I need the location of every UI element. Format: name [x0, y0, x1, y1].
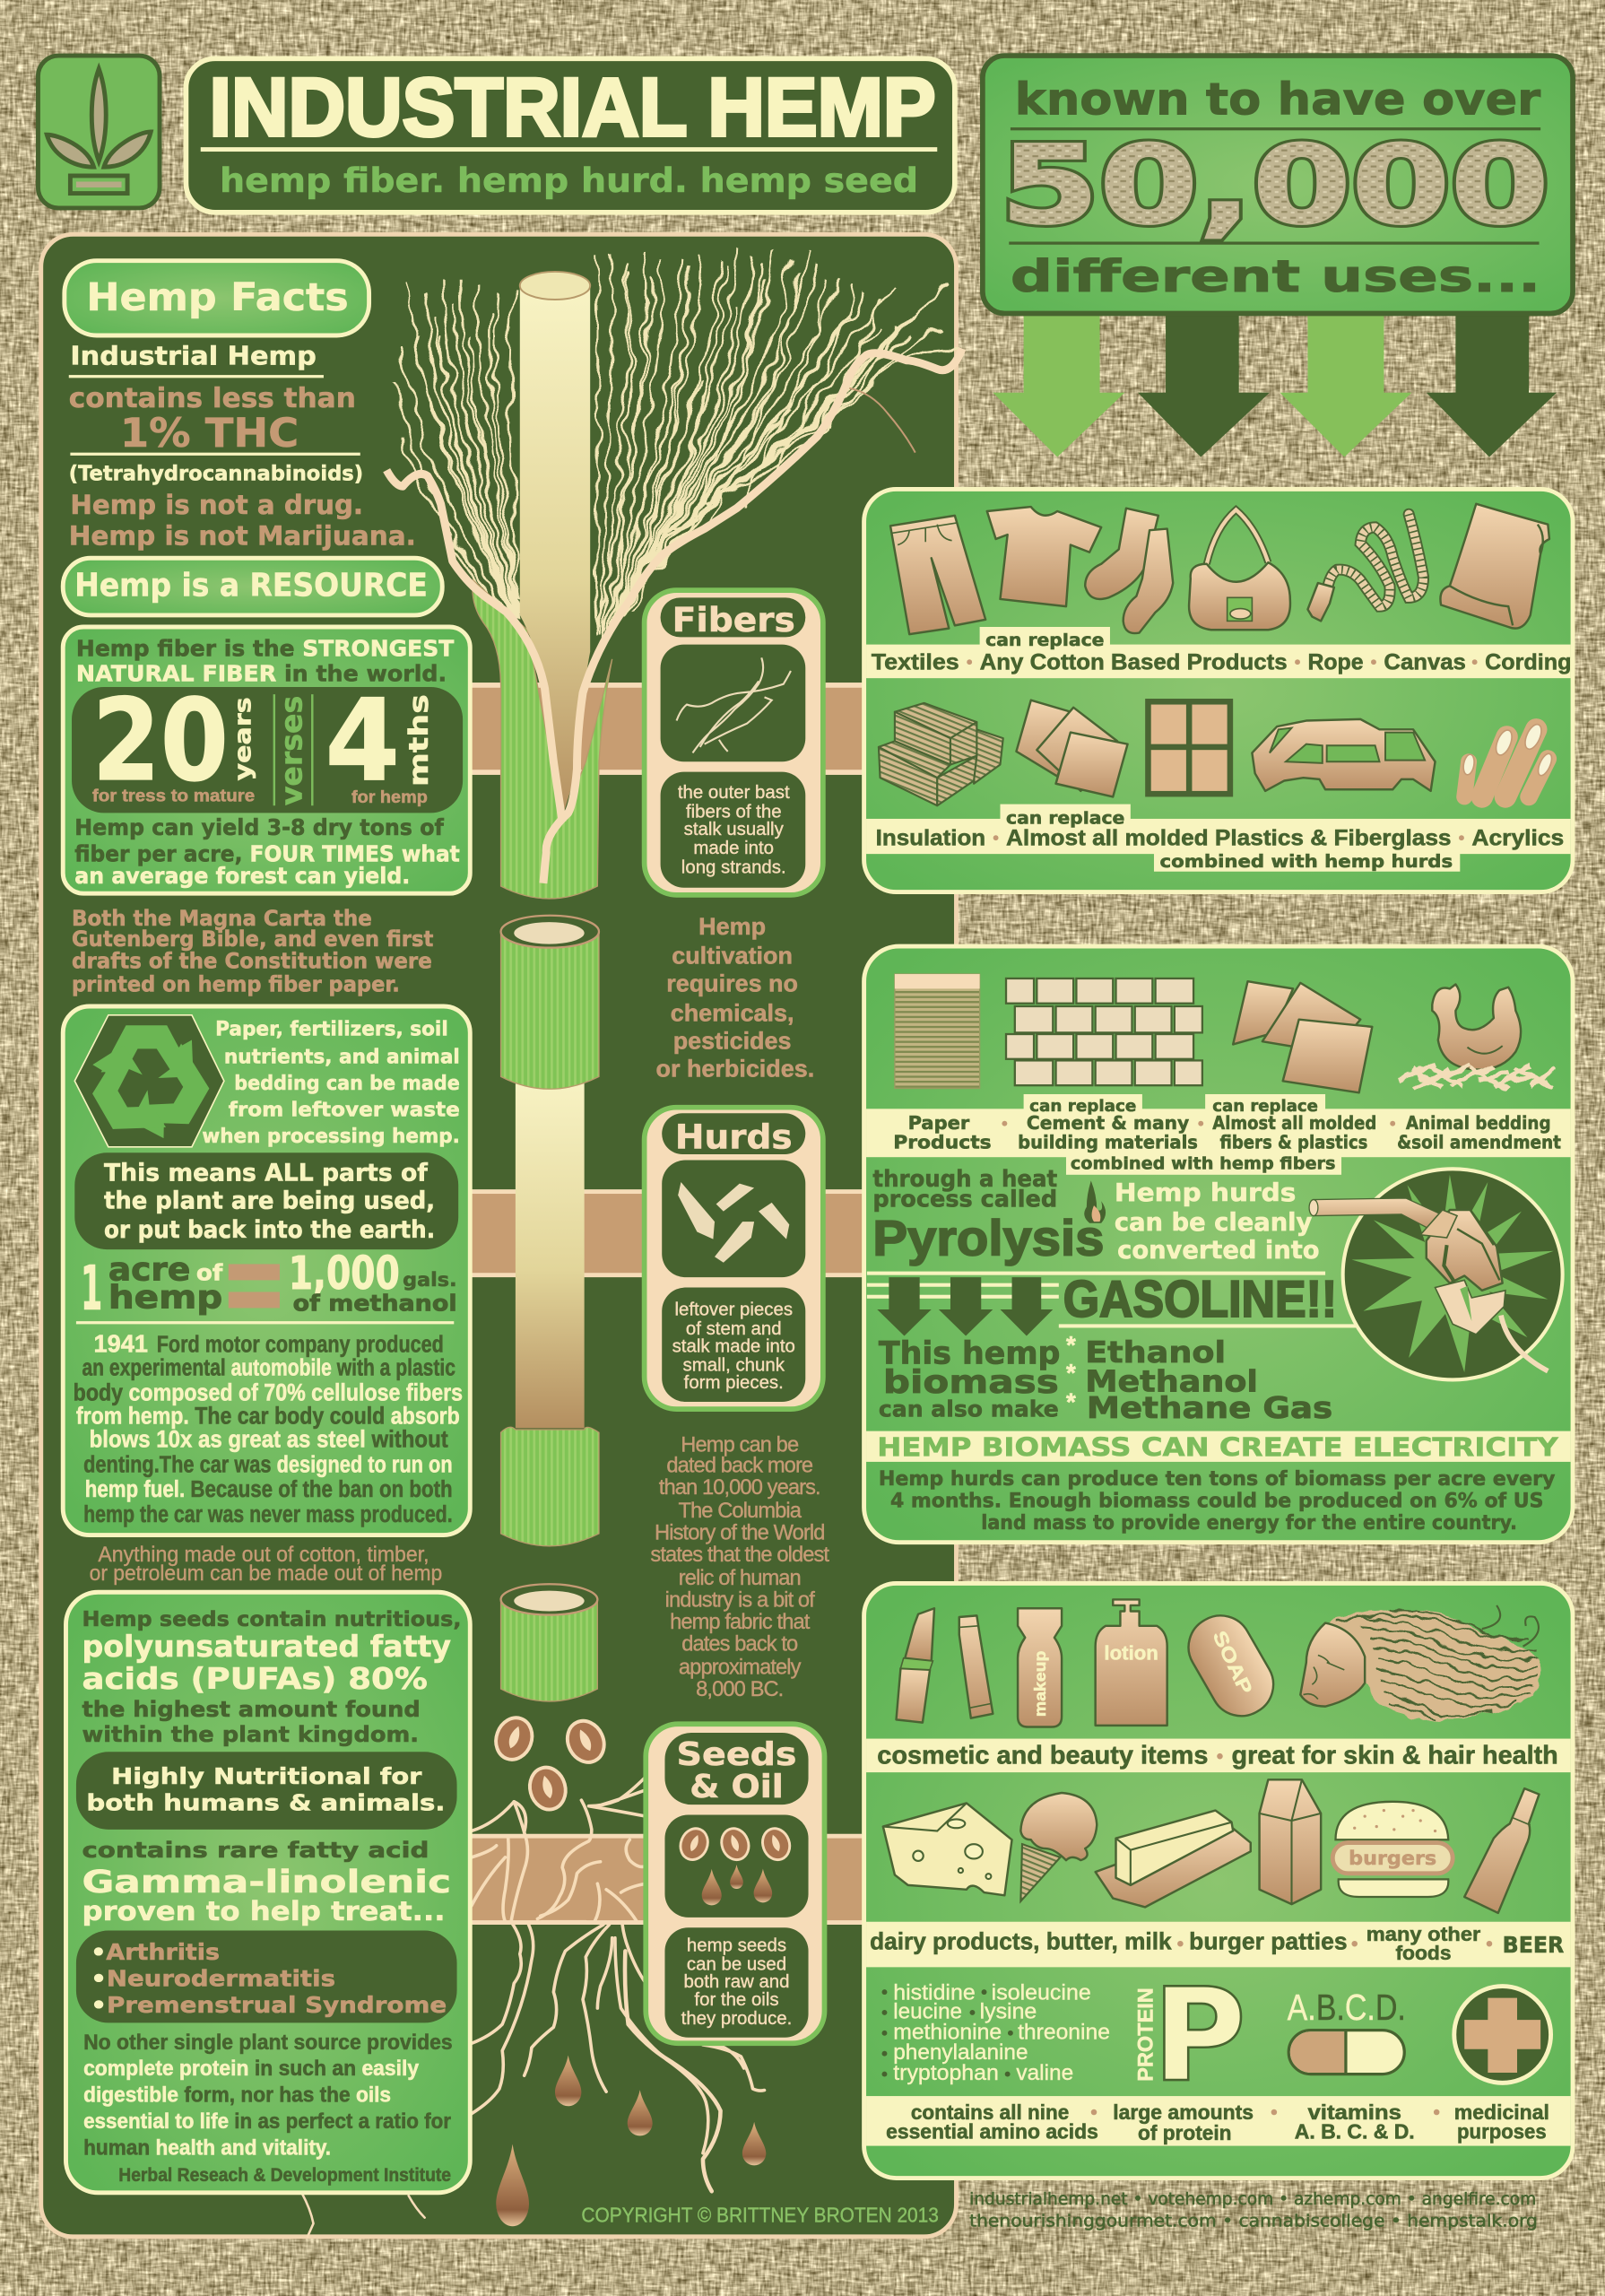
text block: cultivation: cultivation: [672, 943, 793, 970]
equation: 1 acre = 1000 gallons: gals.: [403, 1269, 457, 1292]
text block: 1941 Ford: blows 10x as great as steel without: [90, 1426, 448, 1453]
callout: treatable conditions: •Arthritis: [91, 1939, 220, 1965]
20 years versus 4 months: 20: [92, 674, 229, 806]
icon: acrylic nails: [1462, 722, 1555, 796]
panel: Seeds and Oil: they produce.: [681, 2009, 792, 2029]
20 years versus 4 months: mths: [403, 694, 434, 787]
icon: rope: [1307, 514, 1423, 621]
label band: paper row: can replace: [1029, 1097, 1136, 1116]
text block: cotton timber petroleum: [90, 1544, 442, 1586]
panel: seeds nutrition: contains rare fatty acid: [82, 1838, 429, 1863]
text block: 1941 Ford: 1941: [94, 1329, 148, 1357]
text block: history: dates back to: [681, 1633, 798, 1657]
icon: protein P: P: [1152, 1961, 1246, 2110]
icon: cheese: [883, 1803, 1012, 1895]
text block: THC facts: Hemp is not a drug.: [70, 490, 363, 520]
equation: 1 acre = 1000 gallons: acre: [108, 1251, 190, 1288]
text block: pyrolysis: process called: [872, 1187, 1057, 1213]
icon: makeup bottle: makeup: [1031, 1651, 1049, 1717]
text block: history: The Columbia: [678, 1500, 802, 1523]
equation: 1 acre = 1000 gallons: [81, 1247, 457, 1325]
panel: seeds nutrition: the highest amount found: [82, 1697, 421, 1722]
icon: lotion pump: [1096, 1599, 1167, 1726]
icon: canvas scroll: [1440, 504, 1549, 629]
equation: 1 acre = 1000 gallons: hemp: [108, 1279, 222, 1316]
label band: insulation row: can replace: [1006, 810, 1124, 829]
oil drops: [496, 2056, 766, 2226]
callout: highly nutritional: both humans & animals.: [86, 1790, 445, 1816]
icon: lotion pump: lotion: [1104, 1641, 1158, 1664]
label band: textiles row: can replace: [985, 631, 1104, 650]
panel: Fibers: fibers of the: [686, 802, 782, 822]
stalk lower: cut section: [501, 1584, 597, 1701]
text block: 1941 Ford: an experimental automobile with a plastic: [82, 1354, 455, 1381]
text block: 1941 Ford: denting.The car was designed to run on: [83, 1450, 453, 1477]
text block: cotton timber petroleum: or petroleum can be made out of hemp: [90, 1562, 442, 1586]
label band: paper row: can replace: [1212, 1097, 1318, 1116]
icon: paper notepad: [895, 974, 980, 1088]
text block: biomass energy: land mass to provide energy for the entire country.: [981, 1512, 1517, 1535]
text block: biomass energy: Hemp hurds can produce ten tons of biomass per acre every: [879, 1468, 1555, 1491]
panel: recycling and methanol: nutrients, and animal: [224, 1047, 460, 1069]
20 years versus 4 months: 4: [325, 674, 400, 806]
amino acid list: histidine: [893, 1981, 976, 2005]
text block: history: industry is a bit of: [665, 1589, 815, 1613]
text block: THC facts: Industrial Hemp: [70, 341, 317, 371]
panel: Hurds: Hurds: [675, 1117, 793, 1156]
callout: treatable conditions: •Neurodermatitis: [91, 1966, 335, 1992]
callout: highly nutritional: Highly Nutritional for: [111, 1763, 422, 1789]
text block: history: Hemp can be: [681, 1433, 799, 1457]
panel: Seeds and Oil: hemp seeds: [687, 1935, 786, 1955]
text block: pyrolysis: [872, 1166, 1320, 1266]
icon: recycling hexagon: [74, 1015, 224, 1151]
panel: Hurds: stalk made into: [672, 1336, 795, 1356]
panel: recycling and methanol: bedding can be made: [234, 1073, 460, 1095]
copyright: COPYRIGHT © BRITTNEY BROTEN 2013: [581, 2204, 939, 2227]
panel: strongest natural fiber: [63, 627, 470, 893]
text block: THC facts: [69, 341, 416, 552]
amino acid list: [882, 1981, 1110, 2085]
text block: biomass energy: 4 months. Enough biomass could be produced on 6% of US: [890, 1491, 1543, 1513]
text block: biomass fuels: *: [1066, 1331, 1076, 1359]
label band: foods: many other: [1366, 1923, 1481, 1945]
text block: THC facts: Hemp is not Marijuana.: [69, 521, 416, 552]
heading: Hemp is a RESOURCE: [63, 558, 442, 615]
label band: paper row: combined with hemp fibers: [1071, 1154, 1335, 1173]
label band: insulation row: Insulation: [876, 825, 985, 850]
text block: history: hemp fabric that: [670, 1611, 811, 1634]
panel: recycling and methanol: from leftover waste: [229, 1099, 460, 1121]
horizontal band: fibers: [469, 683, 864, 775]
label band: nutrition: essential amino acids: [886, 2119, 1098, 2143]
heading: Hemp is a RESOURCE: Hemp is a RESOURCE: [74, 568, 428, 604]
text block: biomass fuels: Ethanol: [1085, 1335, 1226, 1370]
stalk middle: bark sleeve with core: [501, 916, 599, 1546]
callout: all parts used: [74, 1152, 458, 1249]
panel: seeds nutrition: polyunsaturated fatty: [82, 1630, 451, 1664]
text block: Magna Carta: Both the Magna Carta the: [72, 906, 372, 931]
icon: t-shirt: [987, 507, 1101, 606]
20 years versus 4 months: [72, 674, 463, 813]
panel: seeds nutrition: Gamma-linolenic: [82, 1865, 451, 1900]
panel: seeds nutrition: [65, 1592, 470, 2193]
panel: seeds nutrition: digestible form, nor has the oils: [83, 2083, 391, 2108]
label band: paper row: Animal bedding: [1406, 1112, 1551, 1134]
title: INDUSTRIAL HEMP: [210, 62, 936, 153]
label band: paper row: Products: [893, 1131, 992, 1152]
label band: insulation row: [866, 804, 1571, 872]
callout: all parts used: or put back into the earth.: [104, 1216, 435, 1244]
text block: 1941 Ford: Ford motor company produced: [157, 1330, 444, 1357]
icon: fuel nozzle in starburst: [1309, 1169, 1563, 1379]
panel: seeds nutrition: human health and vitality.: [83, 2135, 331, 2160]
icon: soap bar: [1177, 1605, 1285, 1727]
icon: chicken on bedding: [1399, 984, 1555, 1090]
text block: history: than 10,000 years.: [659, 1476, 820, 1500]
text block: biomass fuels: biomass: [883, 1364, 1059, 1401]
logo badge: [38, 56, 160, 208]
label band: textiles row: [866, 627, 1571, 678]
label band: textiles row: Any Cotton Based Products: [980, 649, 1288, 674]
panel: recycling and methanol: [63, 1006, 470, 1535]
panel: strongest natural fiber: an average forest can yield.: [74, 863, 410, 889]
20 years versus 4 months: for hemp: [351, 787, 428, 807]
panel: Hurds: form pieces.: [684, 1373, 784, 1393]
label band: nutrition: medicinal: [1454, 2100, 1549, 2124]
text block: pyrolysis: Hemp hurds: [1115, 1178, 1296, 1207]
panel: seeds nutrition: acids (PUFAs) 80%: [82, 1662, 428, 1696]
callout: highly nutritional: [76, 1752, 457, 1830]
amino acid list: tryptophan: [893, 2062, 999, 2085]
text block: pyrolysis: converted into: [1117, 1235, 1320, 1265]
label band: foods: BEER: [1503, 1932, 1564, 1958]
callout: 50,000 uses: [983, 56, 1573, 313]
icon: flowing hair and face: [1300, 1605, 1541, 1719]
label band: paper row: &soil amendment: [1397, 1131, 1561, 1152]
equation: 1 acre = 1000 gallons: 1: [81, 1253, 102, 1325]
label band: paper row: Cement & many: [1027, 1112, 1189, 1134]
panel: Fibers: Fibers: [672, 600, 795, 639]
icon: beer bottle: [1464, 1788, 1540, 1913]
label band: insulation row: Acrylics: [1471, 825, 1564, 850]
panel: recycling and methanol: when processing hemp.: [202, 1126, 460, 1148]
text block: THC facts: contains less than: [69, 383, 356, 414]
label band: nutrition: purposes: [1457, 2119, 1547, 2143]
20 years versus 4 months: for tress to mature: [92, 786, 255, 805]
callout: 50,000 uses: known to have over: [1015, 74, 1541, 125]
text block: biomass fuels: *: [1066, 1388, 1076, 1416]
label band: nutrition: contains all nine: [911, 2100, 1069, 2124]
icon: insulation bales: [879, 703, 1003, 805]
icon: burger: burgers: [1349, 1848, 1436, 1870]
text block: cultivation: Hemp: [698, 913, 766, 940]
amino acid list: isoleucine: [992, 1981, 1091, 2005]
icon: window: [1145, 699, 1233, 796]
label band: textiles row: Canvas: [1384, 649, 1466, 674]
amino acid list: methionine: [893, 2021, 1002, 2044]
icon: seeds and drops: [664, 1815, 809, 1918]
label band: paper row: [866, 1094, 1571, 1175]
panel: recycling and methanol: Paper, fertilizers, soil: [215, 1019, 448, 1041]
horizontal band: seeds: [469, 1834, 864, 1925]
icon: makeup bottle: [1018, 1608, 1062, 1727]
text block: history: states that the oldest: [650, 1544, 829, 1567]
main dark panel: [41, 234, 956, 2237]
callout: treatable conditions: •Premenstrual Syndrome: [91, 1992, 447, 2018]
panel: Seeds and Oil: both raw and: [684, 1972, 789, 1992]
text block: 1941 Ford: hemp fuel. Because of the ban on both: [85, 1475, 453, 1502]
icon: medical cross: [1454, 1987, 1551, 2083]
label band: nutrition: [866, 2096, 1571, 2146]
panel: seeds nutrition: Herbal Reseach & Development Institute: [118, 2165, 451, 2186]
heading: Hemp Facts: Hemp Facts: [86, 276, 349, 320]
text block: 1941 Ford: from hemp. The car body could absorb: [76, 1402, 460, 1429]
callout: 50,000 uses: 50,000: [1000, 122, 1549, 248]
panel: Fibers: long strands.: [681, 857, 786, 877]
icon: socks: [1085, 509, 1173, 633]
icon: plastic sheets: [1233, 981, 1372, 1092]
panel: strongest natural fiber: fiber per acre, FOUR TIMES what: [74, 840, 460, 866]
horizontal band: hurds: [469, 1189, 864, 1277]
amino acid list: lysine: [980, 2001, 1037, 2024]
20 years versus 4 months: years: [230, 697, 256, 780]
panel: Seeds and Oil: can be used: [687, 1955, 786, 1975]
label band: foods: dairy products, butter, milk: [870, 1928, 1172, 1955]
panel: seeds nutrition: No other single plant source provides: [83, 2031, 453, 2055]
label band: nutrition: A. B. C. & D.: [1295, 2119, 1415, 2143]
text block: THC facts: 1% THC: [120, 411, 299, 457]
text block: cultivation: pesticides: [673, 1027, 791, 1054]
text block: pyrolysis: can be cleanly: [1115, 1207, 1312, 1237]
lines and arrows to gasoline: [867, 1272, 1359, 1335]
panel: Seeds and Oil: & Oil: [690, 1769, 784, 1805]
panel: hurd products and fuels: [864, 946, 1573, 1543]
text block: Magna Carta: Gutenberg Bible, and even first: [72, 926, 433, 952]
icon: soap bar: SOAP: [1209, 1628, 1255, 1698]
text block: 1941 Ford: hemp the car was never mass produced.: [83, 1500, 453, 1527]
sources footer: [969, 2190, 1538, 2231]
label band: cosmetics: cosmetic and beauty items: [877, 1741, 1208, 1770]
text block: biomass fuels: *: [1066, 1359, 1076, 1387]
panel: seeds nutrition: essential to life in as perfect a ratio for: [83, 2109, 451, 2134]
callout: 50,000 uses: 50,000: [1000, 122, 1549, 248]
panel: Hurds: small, chunk: [683, 1356, 785, 1376]
label band: paper row: building materials: [1018, 1131, 1198, 1152]
icon: protein P: PROTEIN: [1133, 1987, 1158, 2082]
icon: fiber strands: [661, 645, 805, 761]
panel: Fibers: the outer bast: [678, 783, 790, 803]
equation: 1 acre = 1000 gallons: of methanol: [293, 1291, 457, 1317]
roots: [301, 1777, 765, 2237]
callout: treatable conditions: [76, 1931, 457, 2022]
callout: all parts used: This means ALL parts of: [104, 1159, 428, 1187]
text block: Magna Carta: printed on hemp fiber paper.: [72, 972, 400, 997]
text block: pyrolysis: through a heat: [872, 1166, 1057, 1193]
equation: 1 acre = 1000 gallons: of: [196, 1259, 223, 1285]
text block: cultivation: chemicals,: [671, 999, 794, 1026]
icon: fiberglass sheets: [1016, 700, 1128, 796]
panel: seeds nutrition: complete protein in such an easily: [83, 2057, 419, 2081]
hemp fibers fanning out: [393, 252, 962, 633]
label band: nutrition: vitamins: [1307, 2100, 1401, 2124]
text block: biomass fuels: Methanol: [1085, 1365, 1258, 1399]
20 years versus 4 months: verses: [274, 696, 308, 805]
text block: history: approximately: [679, 1657, 802, 1680]
sources footer: industrialhemp.net • votehemp.com • azhemp.com • angelfire.com: [969, 2190, 1536, 2209]
label band: insulation row: combined with hemp hurds: [1160, 851, 1453, 872]
label band: foods: burger patties: [1189, 1928, 1348, 1955]
panel: Fibers: [645, 590, 823, 895]
text block: history: History of the World: [655, 1521, 824, 1544]
icon: lipstick: [897, 1608, 934, 1723]
icon: pants: [890, 516, 985, 634]
icon: milk carton: [1260, 1779, 1321, 1904]
heading: Hemp Facts: [65, 261, 369, 335]
panel: seeds nutrition: proven to help treat...: [82, 1896, 445, 1926]
label band: foods: [866, 1922, 1571, 1967]
seeds falling: [490, 1713, 611, 1813]
panel: seed products: [864, 1583, 1573, 2179]
text block: biomass fuels: This hemp: [879, 1335, 1060, 1371]
text block: biomass fuels: [879, 1331, 1332, 1425]
callout: 50,000 uses: different uses...: [1011, 251, 1540, 302]
panel: strongest natural fiber: Hemp can yield 3-8 dry tons of: [74, 814, 444, 840]
icon: brick wall: [1006, 978, 1202, 1085]
text block: Magna Carta: drafts of the Constitution were: [72, 949, 432, 974]
text block: cotton timber petroleum: Anything made out of cotton, timber,: [98, 1544, 429, 1567]
icon: flame: [1084, 1180, 1106, 1223]
amino acid list: threonine: [1018, 2021, 1110, 2044]
panel: Seeds and Oil: [646, 1724, 824, 2043]
label band: paper row: fibers & plastics: [1219, 1131, 1367, 1152]
text block: 1941 Ford: [74, 1329, 463, 1527]
text block: 1941 Ford: body composed of 70% cellulose fibers: [74, 1378, 463, 1405]
text block: THC facts: (Tetrahydrocannabinoids): [69, 463, 363, 486]
label band: paper row: Paper: [908, 1112, 969, 1134]
panel: Hurds: [645, 1108, 823, 1409]
icon: handbag: [1189, 509, 1290, 630]
stalk top: bark, peeled fibre edges and core: [386, 272, 962, 899]
equation: 1 acre = 1000 gallons: 1,000: [289, 1247, 400, 1300]
label band: textiles row: Rope: [1307, 649, 1364, 674]
panel: Fibers: made into: [693, 839, 774, 858]
callout: all parts used: the plant are being used,: [104, 1187, 435, 1214]
icon: burger: [1332, 1802, 1453, 1897]
panel: seeds nutrition: within the plant kingdom.: [82, 1722, 419, 1747]
text block: Magna Carta: [72, 906, 433, 997]
text block: biomass energy: [879, 1468, 1555, 1535]
text block: history: relic of human: [679, 1567, 801, 1590]
amino acid list: leucine: [893, 2001, 962, 2024]
text block: history: dated back more: [666, 1454, 813, 1477]
subtitle: hemp fiber. hemp hurd. hemp seed: [220, 161, 918, 200]
icon: hurd pieces: [662, 1160, 805, 1277]
label band: nutrition: of protein: [1138, 2121, 1232, 2144]
icon: car body: [1252, 719, 1436, 791]
icon: vitamins capsule: A.B.C.D.: [1288, 1987, 1406, 2028]
label band: electricity: HEMP BIOMASS CAN CREATE ELECTRICITY: [877, 1431, 1558, 1462]
label band: cosmetics: [866, 1739, 1571, 1772]
text block: biomass fuels: can also make: [879, 1396, 1059, 1422]
label band: nutrition: large amounts: [1113, 2100, 1254, 2124]
label band: foods: foods: [1395, 1942, 1452, 1964]
amino acid list: phenylalanine: [893, 2041, 1028, 2065]
arrows: down to uses: [993, 308, 1557, 457]
label band: paper row: Almost all molded: [1212, 1112, 1376, 1134]
label band: textiles row: Textiles: [872, 649, 959, 674]
panel: Hurds: of stem and: [686, 1319, 782, 1339]
text block: history: 8,000 BC.: [696, 1678, 783, 1701]
heading: gasoline: GASOLINE!!: [1063, 1271, 1337, 1328]
panel: seeds nutrition: Hemp seeds contain nutritious,: [82, 1608, 461, 1631]
panel: Seeds and Oil: for the oils: [694, 1990, 779, 2010]
label band: textiles row: Cording: [1485, 649, 1571, 674]
text block: biomass fuels: Methane Gas: [1087, 1391, 1332, 1425]
label band: insulation row: Almost all molded Plastics & Fiberglass: [1006, 825, 1452, 850]
icon: butter dish: [1096, 1811, 1251, 1907]
text block: cultivation: requires no: [666, 970, 798, 997]
label band: cosmetics: great for skin & hair health: [1232, 1741, 1558, 1770]
panel: fiber and hurd products: [864, 489, 1573, 892]
text block: cultivation: or herbicides.: [656, 1055, 814, 1082]
panel: Fibers: stalk usually: [684, 820, 785, 839]
sources footer: thenourishinggourmet.com • cannabiscollege • hempstalk.org: [969, 2212, 1538, 2231]
icon: vitamins capsule: [1288, 1987, 1406, 2074]
panel: strongest natural fiber: Hemp fiber is the STRONGEST: [76, 636, 455, 662]
icon: lip balm: [959, 1615, 993, 1718]
title panel: [186, 58, 955, 213]
icon: ice cream cone: [1020, 1793, 1097, 1901]
panel: Seeds and Oil: Seeds: [677, 1736, 796, 1773]
panel: Hurds: leftover pieces: [674, 1300, 793, 1320]
panel: strongest natural fiber: NATURAL FIBER in the world.: [76, 660, 447, 686]
text block: pyrolysis: Pyrolysis: [872, 1211, 1104, 1266]
amino acid list: valine: [1016, 2062, 1073, 2085]
